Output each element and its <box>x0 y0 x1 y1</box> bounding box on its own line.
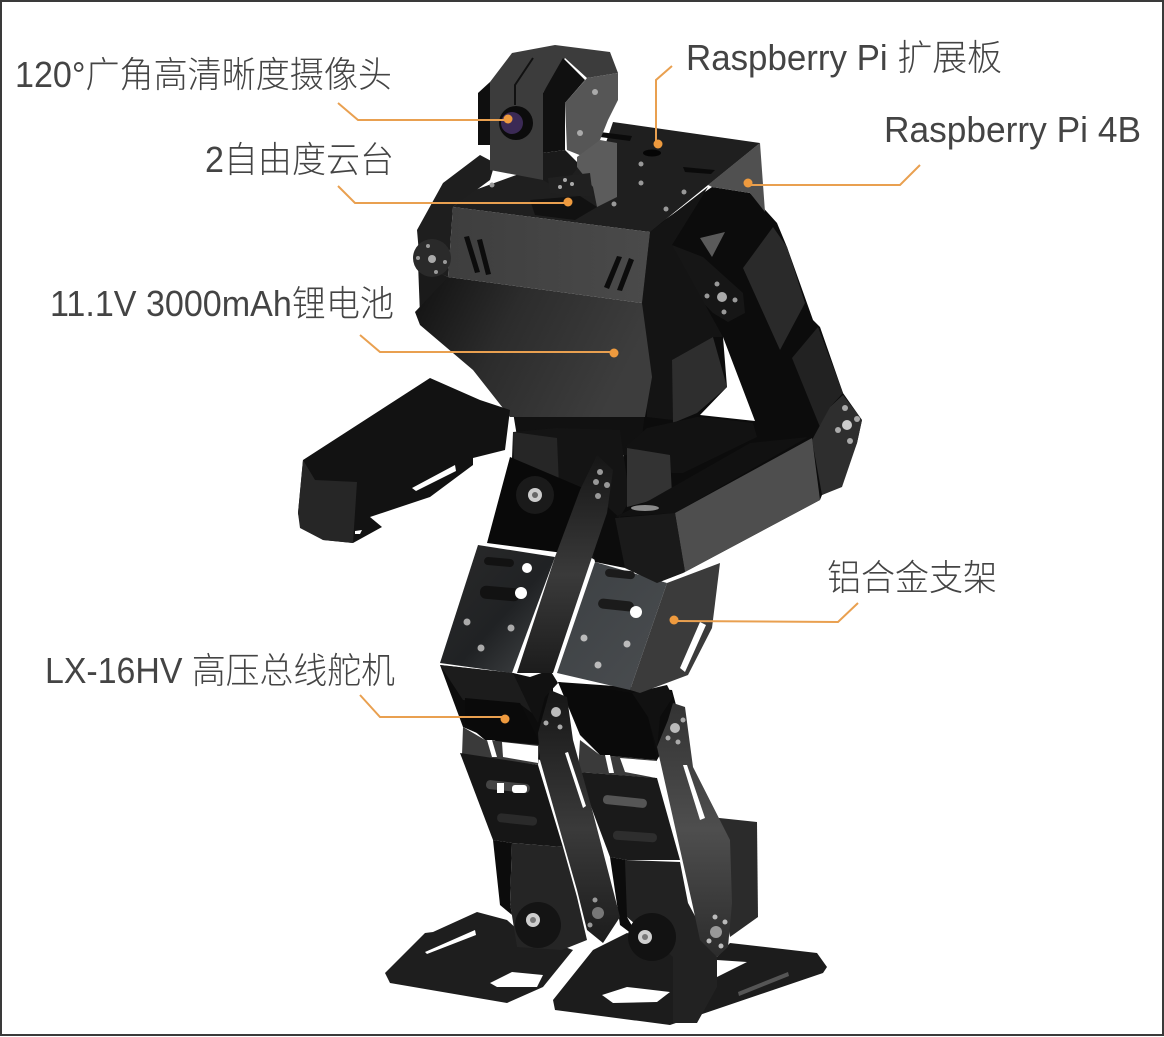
top plate slots and screws <box>490 132 715 212</box>
label: battery: 11.1V 3000mAh锂电池 <box>50 283 394 324</box>
label: Raspberry Pi 4B <box>744 109 1141 188</box>
right shin bar <box>657 703 732 957</box>
label: servo <box>45 650 510 724</box>
left forearm <box>298 378 510 543</box>
label: pan-tilt: 2自由度云台 <box>205 139 394 180</box>
label: aluminium bracket <box>670 557 997 624</box>
label: battery <box>50 283 618 358</box>
right foot <box>553 860 827 1025</box>
camera lens <box>499 106 533 140</box>
label: Raspberry Pi expansion board <box>654 37 1002 148</box>
right arm <box>615 187 862 583</box>
label: camera <box>15 54 512 124</box>
left lower leg <box>460 698 563 915</box>
left foot <box>385 843 587 1003</box>
left shin bar <box>538 690 620 943</box>
label: Raspberry Pi 4B: Raspberry Pi 4B <box>884 109 1141 150</box>
hips <box>510 417 757 560</box>
label: Raspberry Pi expansion board: Raspberry Pi 扩展板 <box>686 37 1002 78</box>
left thigh <box>440 457 625 760</box>
label: aluminium bracket: 铝合金支架 <box>827 557 997 598</box>
right thigh <box>557 562 720 760</box>
torso <box>413 122 765 455</box>
back servo at right foot <box>710 817 758 937</box>
center thigh bar <box>517 455 613 673</box>
label: servo: LX-16HV 高压总线舵机 <box>45 650 395 691</box>
right lower leg <box>558 682 680 940</box>
head with camera <box>478 45 618 190</box>
right forearm <box>615 437 820 583</box>
label: camera: 120°广角高清晰度摄像头 <box>15 54 392 95</box>
pan-tilt <box>530 140 617 220</box>
label: pan-tilt <box>205 139 572 206</box>
battery vents <box>464 236 634 291</box>
robot <box>298 45 862 1025</box>
